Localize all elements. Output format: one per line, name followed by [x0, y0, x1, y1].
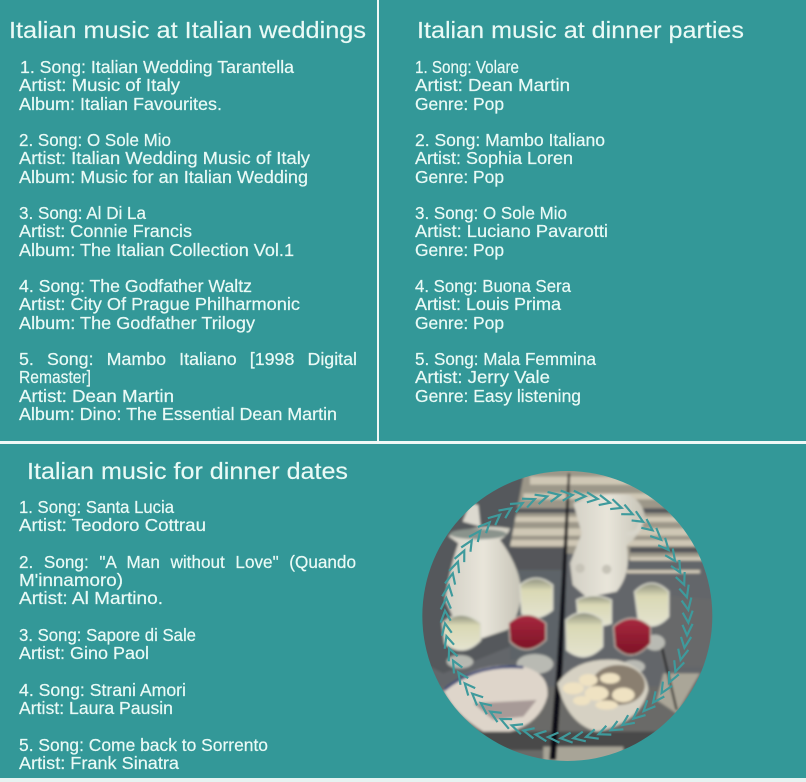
parties song 5: Artist: Jerry Vale	[415, 367, 550, 387]
weddings song 5: Artist: Dean Martin	[19, 386, 174, 406]
weddings song 2	[19, 130, 310, 187]
weddings song 2: Album: Music for an Italian Wedding	[19, 167, 308, 187]
weddings song 3: Album: The Italian Collection Vol.1	[19, 240, 294, 260]
parties song 1: Genre: Pop	[415, 94, 504, 114]
dates song 3: Artist: Gino Paol	[19, 643, 149, 663]
right bowl	[557, 660, 648, 732]
dates song 2: Artist: Al Martino.	[19, 588, 163, 608]
panel: Italian music at Italian weddings	[9, 17, 366, 424]
almonds in bowl	[563, 673, 635, 710]
parties song 5: Genre: Easy listening	[415, 386, 581, 406]
dates song 2: 2. Song: "A Man without Love" (Quando	[19, 552, 356, 572]
parties song 4: Genre: Pop	[415, 313, 504, 333]
weddings song 4: Artist: City Of Prague Philharmonic	[19, 294, 300, 314]
left jug	[463, 503, 481, 527]
dates song 2: M'innamoro)	[19, 570, 123, 590]
weddings song 1	[19, 57, 294, 114]
parties song 5: 5. Song: Mala Femmina	[415, 349, 596, 369]
weddings song 2: Artist: Italian Wedding Music of Italy	[19, 148, 310, 168]
glass bases	[447, 635, 665, 674]
red wine glasses	[509, 615, 546, 650]
dates song 1: 1. Song: Santa Lucia	[19, 497, 174, 517]
dates song 3: 3. Song: Sapore di Sale	[19, 625, 196, 645]
dates song 4: Artist: Laura Pausin	[19, 698, 173, 718]
parties song 4	[415, 276, 571, 333]
table background	[432, 479, 712, 688]
parties song 4: Artist: Louis Prima	[415, 294, 561, 314]
parties song 3: Artist: Luciano Pavarotti	[415, 221, 608, 241]
parties song 3: Genre: Pop	[415, 240, 504, 260]
parties song 2: Artist: Sophia Loren	[415, 148, 573, 168]
dates song 1: Artist: Teodoro Cottrau	[19, 515, 206, 535]
dates song 5: Artist: Frank Sinatra	[19, 753, 179, 773]
parties song 3: 3. Song: O Sole Mio	[415, 203, 567, 223]
heading: dinner parties: Italian music at dinner parties	[417, 17, 744, 43]
parties song 2: Genre: Pop	[415, 167, 504, 187]
weddings song 1: 1. Song: Italian Wedding Tarantella	[20, 57, 294, 77]
weddings song 1: Artist: Music of Italy	[19, 75, 180, 95]
weddings song 5: Remaster]	[19, 367, 91, 387]
weddings song 3: Artist: Connie Francis	[19, 221, 192, 241]
panel: Italian music at dinner parties	[415, 17, 744, 406]
parties song 1: Artist: Dean Martin	[415, 75, 570, 95]
heading: dinner dates: Italian music for dinner dates	[27, 458, 348, 484]
weddings song 4	[19, 276, 300, 333]
weddings song 5: 5. Song: Mambo Italiano [1998 Digital	[19, 349, 357, 369]
weddings song 4: 4. Song: The Godfather Waltz	[19, 276, 252, 296]
white wine glasses	[443, 578, 669, 657]
weddings song 4: Album: The Godfather Trilogy	[19, 313, 255, 333]
parties song 5	[415, 349, 596, 406]
panel: Italian music for dinner dates	[19, 458, 356, 773]
heading: weddings: Italian music at Italian weddings	[9, 17, 366, 43]
dates song 4	[19, 680, 186, 718]
parties song 4: 4. Song: Buona Sera	[415, 276, 571, 296]
dates song 1	[19, 497, 206, 535]
weddings song 5: Album: Dino: The Essential Dean Martin	[19, 404, 337, 424]
dates song 3	[19, 625, 196, 663]
parties song 2: 2. Song: Mambo Italiano	[415, 130, 605, 150]
dates song 4: 4. Song: Strani Amori	[19, 680, 186, 700]
dates song 2	[19, 552, 356, 608]
weddings song 2: 2. Song: O Sole Mio	[19, 130, 171, 150]
parties song 1: 1. Song: Volare	[415, 57, 519, 77]
dates song 5: 5. Song: Come back to Sorrento	[19, 735, 268, 755]
parties song 3	[415, 203, 608, 260]
right jug	[570, 494, 645, 597]
weddings song 3: 3. Song: Al Di La	[19, 203, 146, 223]
parties song 1	[415, 57, 570, 114]
parties song 2	[415, 130, 605, 187]
circular photo: wine glasses, jugs and bowls on a table	[417, 467, 720, 767]
weddings song 5	[19, 349, 357, 424]
left bowl	[443, 665, 548, 732]
weddings song 1: Album: Italian Favourites.	[19, 94, 222, 114]
dates song 5	[19, 735, 268, 773]
weddings song 3	[19, 203, 294, 260]
chevron ring	[441, 491, 693, 743]
